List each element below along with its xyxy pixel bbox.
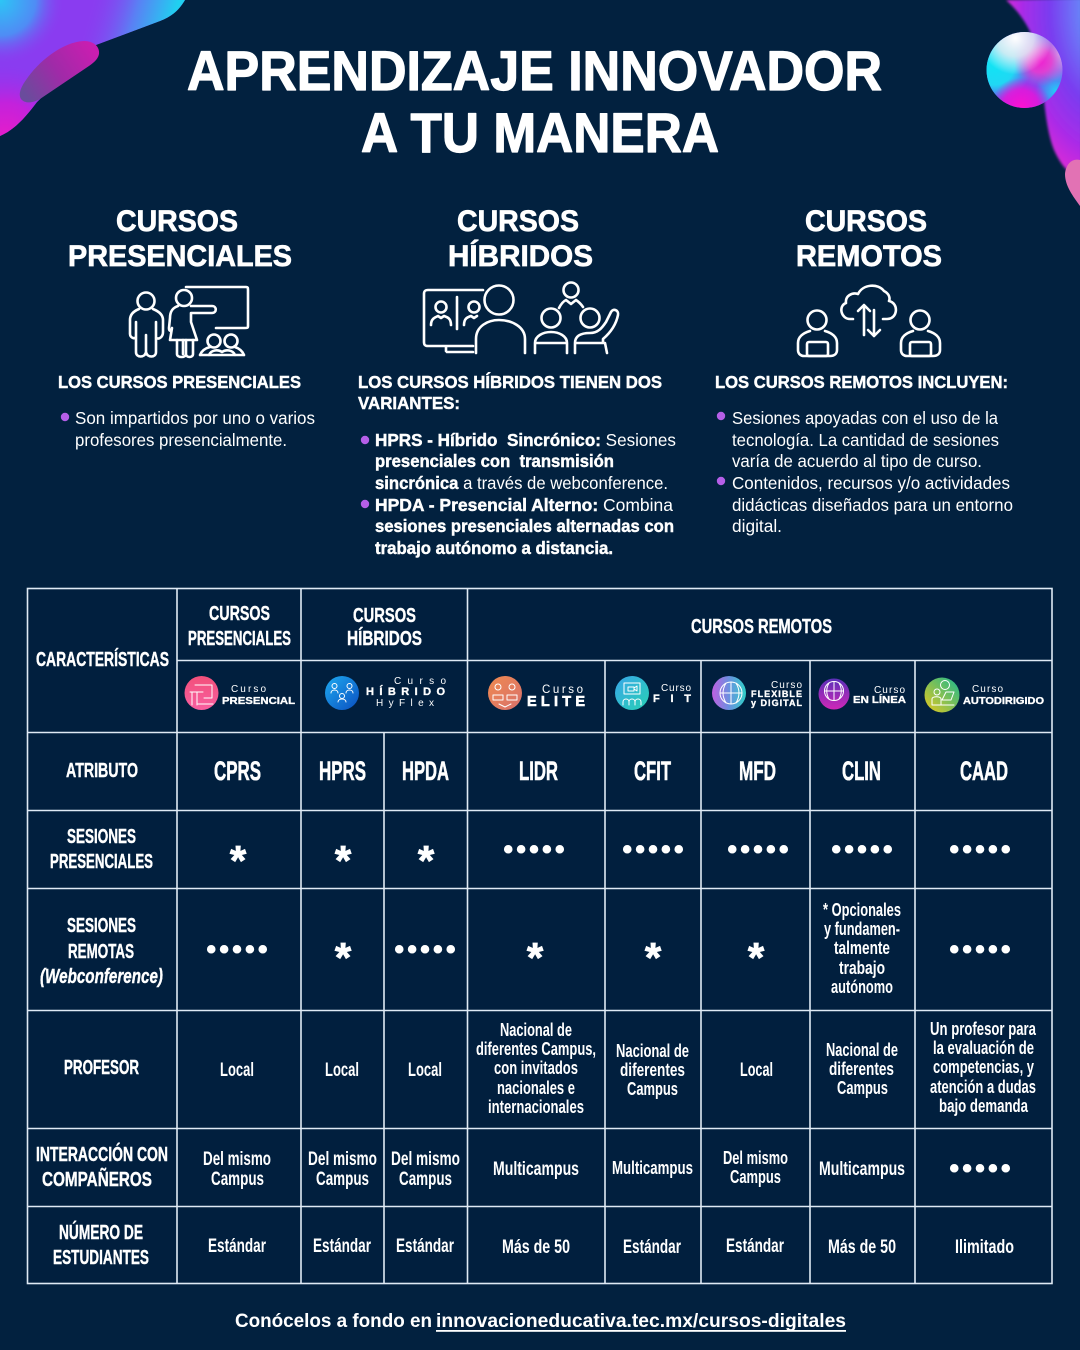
row: interacción con compañeros: Multicampus xyxy=(493,1158,579,1180)
row: número de estudiantes xyxy=(53,1220,1014,1269)
row: sesiones remotas: talmente xyxy=(834,937,890,958)
row: profesor: Local xyxy=(220,1059,254,1081)
logo: curso presencial: PRESENCIAL xyxy=(222,695,296,707)
row: sesiones presenciales: * xyxy=(418,837,435,884)
logo: curso presencial: Curso xyxy=(231,684,266,695)
heading: cursos híbridos: HÍBRIDOS xyxy=(448,239,593,273)
row: profesor: bajo demanda xyxy=(939,1095,1029,1116)
logo: curso híbrido hyflex: HÍBRIDO xyxy=(366,685,445,698)
logo: curso elite xyxy=(488,676,585,710)
icon: cloud with two users xyxy=(798,286,940,356)
logo: curso autodirigido xyxy=(924,678,1044,712)
row: número de estudiantes: Estándar xyxy=(313,1235,371,1257)
row: interacción con compañeros: Campus xyxy=(399,1168,452,1190)
row: atributo: LIDR xyxy=(519,756,558,786)
title: A TU MANERA xyxy=(361,101,719,164)
table header: categories xyxy=(36,603,832,671)
row: sesiones remotas: ••••• xyxy=(394,933,456,966)
row: interacción con compañeros: Campus xyxy=(211,1168,264,1190)
table header: categories: PRESENCIALES xyxy=(188,628,291,650)
bullet: sesiones xyxy=(717,408,999,471)
row: número de estudiantes: Ilimitado xyxy=(955,1236,1014,1258)
row: sesiones presenciales: ••••• xyxy=(622,833,684,866)
row: interacción con compañeros: COMPAÑEROS xyxy=(42,1168,152,1191)
row: sesiones remotas: (Webconference) xyxy=(40,966,163,988)
row: profesor: internacionales xyxy=(488,1096,584,1117)
row: sesiones presenciales: PRESENCIALES xyxy=(50,851,153,873)
logo: curso autodirigido: AUTODIRIGIDO xyxy=(963,695,1044,707)
row: sesiones remotas: y fundamen- xyxy=(824,918,900,939)
heading: cursos híbridos xyxy=(448,205,593,273)
title: APRENDIZAJE INNOVADOR xyxy=(187,39,882,102)
row: sesiones presenciales xyxy=(50,826,1011,884)
footer link: Conócelos a fondo en xyxy=(235,1310,432,1332)
heading: cursos presenciales: PRESENCIALES xyxy=(68,240,292,273)
row: interacción con compañeros: INTERACCIÓN CON xyxy=(36,1142,168,1166)
row: atributo: CAAD xyxy=(960,756,1008,786)
logo: curso flexible y digital: Curso xyxy=(771,680,802,691)
panel: cursos híbridos xyxy=(358,205,676,558)
table header: categories: CURSOS xyxy=(353,605,416,627)
logo: curso autodirigido: Curso xyxy=(972,684,1003,695)
logo: curso híbrido hyflex xyxy=(325,676,446,710)
heading: cursos presenciales xyxy=(68,205,292,273)
row: sesiones presenciales: ••••• xyxy=(949,833,1011,866)
row: profesor: competencias, y xyxy=(933,1056,1034,1077)
icon: videoconference and group xyxy=(424,282,618,353)
bullet: HPRS: sincrónica a través de webconference. xyxy=(375,473,668,493)
row: profesor: Local xyxy=(325,1059,359,1081)
row: sesiones remotas: REMOTAS xyxy=(68,941,134,963)
logo: curso flexible y digital: FLEXIBLE xyxy=(751,689,802,699)
bullet: HPRS xyxy=(361,430,676,493)
bullet: HPDA: trabajo autónomo a distancia. xyxy=(375,538,613,558)
decorative blob top left xyxy=(0,0,190,140)
row: sesiones remotas: ••••• xyxy=(949,933,1011,966)
bullet list: presenciales xyxy=(61,408,315,450)
logo: curso fit: Curso xyxy=(661,683,691,694)
text block: híbridos lead xyxy=(358,371,662,413)
row: sesiones remotas: SESIONES xyxy=(67,915,136,937)
heading: cursos híbridos: CURSOS xyxy=(457,205,579,238)
bullet: HPDA xyxy=(361,495,674,558)
icon: teacher at a board with students xyxy=(130,287,248,357)
row: profesor: diferentes xyxy=(620,1059,685,1080)
bullet: sesiones: tecnología. La cantidad de sesiones xyxy=(732,430,999,450)
logo: curso en línea xyxy=(818,678,906,710)
row: atributo: CLIN xyxy=(842,756,881,786)
bullet: contenidos: Contenidos, recursos y/o actividades xyxy=(732,473,1010,493)
footer link: innovacioneducativa.tec.mx/cursos-digitales xyxy=(436,1310,846,1332)
panel: cursos remotos xyxy=(715,205,1013,536)
decorative blob top right xyxy=(1006,0,1080,206)
row: sesiones remotas: trabajo xyxy=(839,957,885,978)
logo: curso flexible y digital xyxy=(712,676,802,710)
row: profesor: Campus xyxy=(837,1077,888,1098)
bullet: HPRS: presenciales con transmisión xyxy=(375,451,614,471)
row: profesor: Local xyxy=(740,1059,773,1081)
row: sesiones presenciales: ••••• xyxy=(503,833,565,866)
row: interacción con compañeros: Multicampus xyxy=(819,1158,905,1180)
row: interacción con compañeros: Multicampus xyxy=(612,1157,693,1178)
row: profesor: Local xyxy=(408,1059,442,1081)
bullet: contenidos xyxy=(717,473,1013,536)
row: sesiones remotas: * xyxy=(527,934,544,981)
row: interacción con compañeros: Campus xyxy=(316,1168,369,1190)
text block: remotos lead: LOS CURSOS REMOTOS INCLUYEN: xyxy=(715,372,1008,392)
row: profesor: atención a dudas xyxy=(930,1076,1036,1097)
table header: categories: CURSOS REMOTOS xyxy=(691,616,832,638)
bullet: HPRS: HPRS - Híbrido Sincrónico: Sesiones xyxy=(375,430,676,450)
bullet: HPDA: HPDA - Presencial Alterno: Combina xyxy=(375,495,673,515)
row: interacción con compañeros xyxy=(36,1142,1011,1191)
heading: cursos presenciales: CURSOS xyxy=(116,205,238,238)
row: sesiones remotas: * xyxy=(748,934,765,981)
row: sesiones presenciales: * xyxy=(230,837,247,884)
bullet list: presenciales: Son impartidos por uno o varios xyxy=(75,408,315,428)
row: sesiones remotas: ••••• xyxy=(206,933,268,966)
row: sesiones presenciales: ••••• xyxy=(727,833,789,866)
row: atributo: MFD xyxy=(739,756,776,786)
row: profesor xyxy=(64,1018,1037,1117)
row: profesor: Un profesor para xyxy=(930,1018,1037,1039)
row: profesor: PROFESOR xyxy=(64,1057,139,1079)
row: número de estudiantes: ESTUDIANTES xyxy=(53,1247,149,1269)
text block: híbridos lead: LOS CURSOS HÍBRIDOS TIENEN DOS xyxy=(358,371,662,392)
row: número de estudiantes: Más de 50 xyxy=(828,1236,896,1258)
table header: categories: HÍBRIDOS xyxy=(347,627,422,650)
row: interacción con compañeros: Campus xyxy=(730,1166,781,1187)
row: atributo: HPRS xyxy=(319,756,366,786)
row: interacción con compañeros: Del mismo xyxy=(723,1147,788,1168)
bullet: sesiones: varía de acuerdo al tipo de curso. xyxy=(732,451,982,471)
logo: curso en línea: EN LÍNEA xyxy=(853,693,906,706)
row: número de estudiantes: Más de 50 xyxy=(502,1236,570,1258)
row: sesiones presenciales: SESIONES xyxy=(67,826,136,848)
logo: curso flexible y digital: y DIGITAL xyxy=(751,698,802,708)
row: interacción con compañeros: ••••• xyxy=(949,1152,1011,1185)
bullet: sesiones: Sesiones apoyadas con el uso de la xyxy=(732,408,998,428)
row: sesiones remotas: * xyxy=(645,934,662,981)
row: sesiones remotas xyxy=(40,899,1011,997)
text block: híbridos lead: VARIANTES: xyxy=(358,393,460,413)
row: número de estudiantes: Estándar xyxy=(396,1235,454,1257)
row: profesor: diferentes xyxy=(829,1058,894,1079)
row: interacción con compañeros: Del mismo xyxy=(203,1148,271,1170)
heading: cursos remotos xyxy=(796,205,942,273)
row: sesiones remotas: * xyxy=(335,934,352,981)
row: atributo: CPRS xyxy=(214,756,261,786)
row: profesor: Nacional de xyxy=(616,1040,689,1061)
table header: categories: CARACTERÍSTICAS xyxy=(36,648,169,671)
heading: cursos remotos: CURSOS xyxy=(805,205,927,238)
logo: curso fit: FIT xyxy=(653,693,691,705)
row: número de estudiantes: Estándar xyxy=(726,1235,784,1257)
row: profesor: la evaluación de xyxy=(933,1037,1034,1058)
row: número de estudiantes: Estándar xyxy=(623,1236,681,1258)
logo: curso elite: ELITE xyxy=(527,694,585,710)
row: profesor: nacionales e xyxy=(497,1077,575,1098)
table header: categories: CURSOS xyxy=(209,603,270,625)
comparison table xyxy=(28,588,1052,1284)
row: profesor: Nacional de xyxy=(826,1039,898,1060)
row: sesiones remotas: autónomo xyxy=(831,976,893,997)
row: profesor: con invitados xyxy=(494,1057,578,1078)
table grid xyxy=(28,588,1052,1284)
row: número de estudiantes: Estándar xyxy=(208,1235,266,1257)
bullet: HPDA: sesiones presenciales alternadas con xyxy=(375,516,674,536)
footer link xyxy=(235,1310,846,1332)
row: atributo: CFIT xyxy=(634,756,671,786)
bullet list: presenciales: profesores presencialmente. xyxy=(75,430,287,450)
bullet: contenidos: digital. xyxy=(732,516,782,536)
row: interacción con compañeros: Del mismo xyxy=(308,1148,377,1170)
row: atributo: ATRIBUTO xyxy=(66,760,138,782)
text block: presenciales lead: LOS CURSOS PRESENCIALES xyxy=(58,372,301,392)
bullet: contenidos: didácticas diseñados para un entorno xyxy=(732,495,1013,515)
logo: curso presencial xyxy=(184,676,296,710)
logo: curso elite: Curso xyxy=(542,684,583,696)
heading: cursos remotos: REMOTOS xyxy=(796,240,942,273)
row: interacción con compañeros: Del mismo xyxy=(391,1148,460,1170)
logo: curso híbrido hyflex: Curso xyxy=(394,676,446,687)
logo: curso en línea: Curso xyxy=(874,685,905,696)
row: atributo: HPDA xyxy=(402,756,449,786)
row: sesiones presenciales: * xyxy=(335,837,352,884)
row: sesiones remotas: * Opcionales xyxy=(823,899,901,920)
row: profesor: diferentes Campus, xyxy=(476,1038,596,1059)
row: profesor: Nacional de xyxy=(500,1019,572,1040)
row: número de estudiantes: NÚMERO DE xyxy=(59,1220,143,1244)
row: profesor: Campus xyxy=(627,1078,678,1099)
logo: curso fit xyxy=(615,676,691,710)
logo: curso híbrido hyflex: HyFlex xyxy=(376,698,434,709)
row: sesiones presenciales: ••••• xyxy=(831,833,893,866)
panel: cursos presenciales xyxy=(58,205,315,450)
row: atributo xyxy=(66,756,1008,786)
decorative sphere xyxy=(986,32,1062,108)
title xyxy=(187,39,882,164)
